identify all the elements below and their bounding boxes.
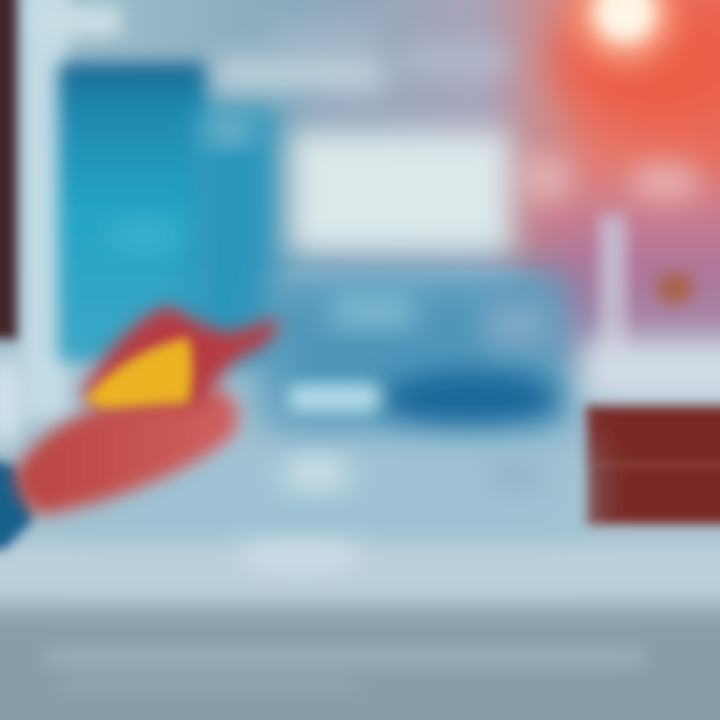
lower floor [0,612,720,720]
middle blue area [262,272,567,437]
yellow highlight [84,338,192,408]
right pink panel [530,180,720,360]
pale vertical column [600,215,626,365]
lower misty area [60,445,580,545]
floor band [0,545,720,600]
right cloud highlights [517,154,701,202]
pale wedge by cuff [0,356,22,444]
background sky gradient [0,0,720,545]
bottom text blur lines [45,648,645,692]
dark door edge [0,0,18,340]
top left label blur [36,6,121,36]
heading blur lines [215,28,510,114]
red glow top right [555,0,720,130]
teal panel [58,62,278,365]
lower mist labels [285,458,540,490]
hand [15,305,278,515]
blue cuff [0,450,34,550]
floor highlight [245,542,355,570]
small orange icon [657,272,693,304]
right white band [585,342,720,400]
white panel [292,132,510,256]
pale strip left [22,0,68,420]
brick wall [586,405,720,525]
sun [577,0,673,62]
